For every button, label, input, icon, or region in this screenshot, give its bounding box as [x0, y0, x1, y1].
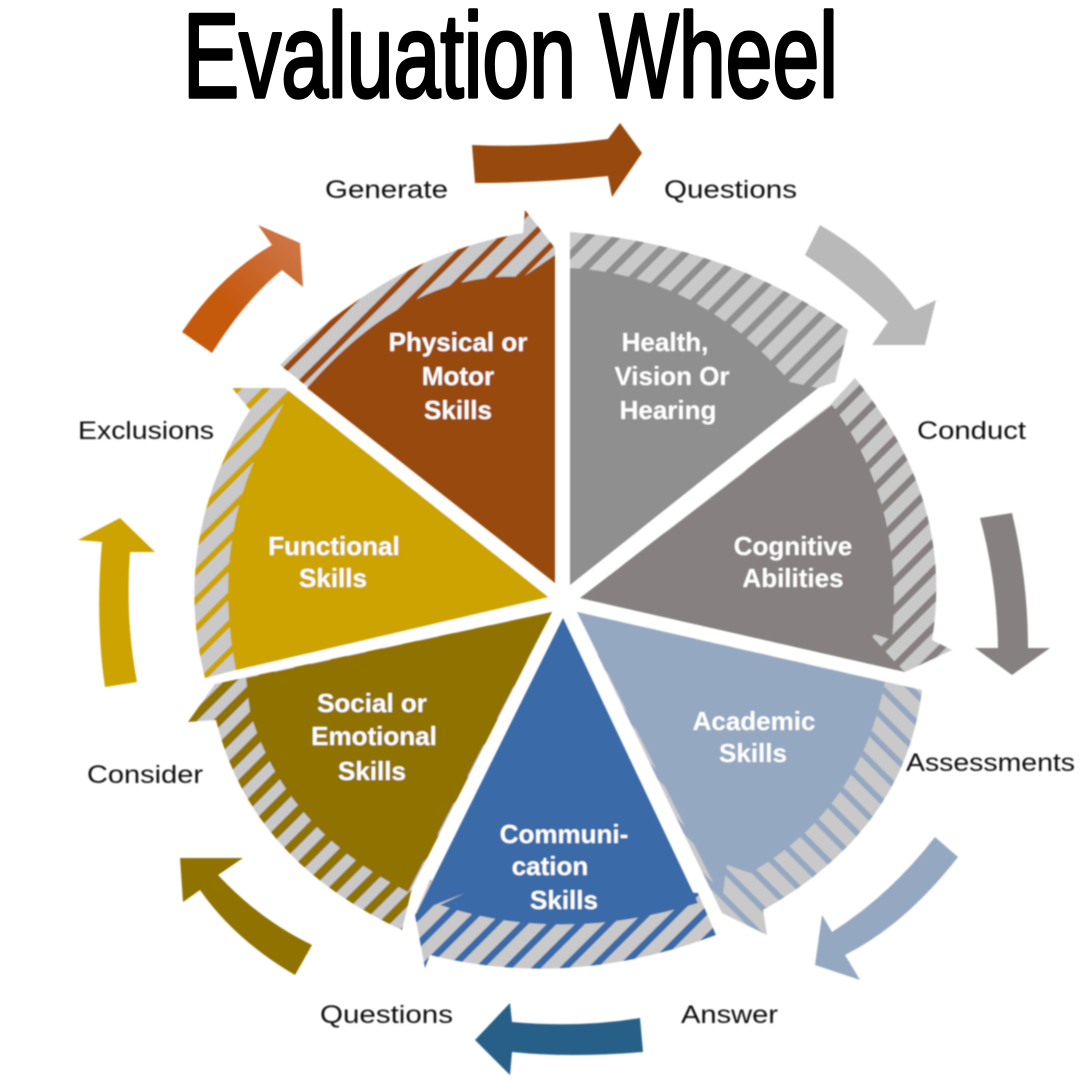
segment: health, vision or hearing: Vision Or	[614, 361, 730, 391]
label: questions bottom: Questions	[320, 1001, 453, 1029]
segment: physical or motor skills: Physical or	[389, 327, 527, 357]
arrow: assessments to answer	[815, 837, 958, 980]
segment: social or emotional skills	[188, 612, 552, 930]
segment: communication skills: Skills	[530, 885, 598, 915]
segment: health, vision or hearing: Hearing	[620, 395, 716, 425]
label: answer: Answer	[681, 1001, 778, 1029]
label: exclusions: Exclusions	[78, 417, 214, 445]
segment: communication skills: Communi-	[500, 819, 628, 849]
segment: academic skills: Skills	[719, 738, 787, 768]
segment: health, vision or hearing: Health,	[622, 327, 708, 357]
segment: health, vision or hearing	[570, 232, 848, 585]
arrow: questions to consider	[180, 858, 312, 975]
arrow: consider to exclusions	[78, 518, 155, 687]
segment: communication skills	[415, 618, 716, 969]
arrow: answer to questions	[475, 1003, 643, 1075]
segment: functional skills: Skills	[299, 563, 367, 593]
label: generate: Generate	[325, 176, 448, 204]
segment: academic skills: Academic	[693, 706, 815, 736]
label: questions top: Questions	[664, 176, 797, 204]
label: conduct: Conduct	[917, 417, 1026, 445]
segment: social or emotional skills: Emotional	[311, 721, 437, 751]
segment: cognitive abilities: Abilities	[742, 563, 844, 593]
segment: academic skills	[577, 612, 922, 935]
arrow: conduct to assessments	[975, 513, 1050, 675]
label: assessments: Assessments	[906, 749, 1075, 777]
segment: physical or motor skills: Skills	[424, 395, 492, 425]
segment: physical or motor skills: Motor	[422, 361, 494, 391]
arrow: questions to conduct	[805, 225, 936, 345]
segment: functional skills	[194, 388, 548, 678]
segment: communication skills: cation	[512, 851, 588, 881]
segment: physical or motor skills	[280, 210, 555, 583]
segment: social or emotional skills: Skills	[338, 756, 406, 786]
segment: social or emotional skills: Social or	[317, 688, 427, 718]
arrow: exclusions to generate	[182, 225, 303, 353]
segment: cognitive abilities	[580, 378, 952, 672]
segment: cognitive abilities: Cognitive	[734, 531, 852, 561]
label: consider: Consider	[87, 761, 203, 789]
segment: functional skills: Functional	[268, 531, 400, 561]
arrow: generate to questions	[472, 123, 642, 197]
